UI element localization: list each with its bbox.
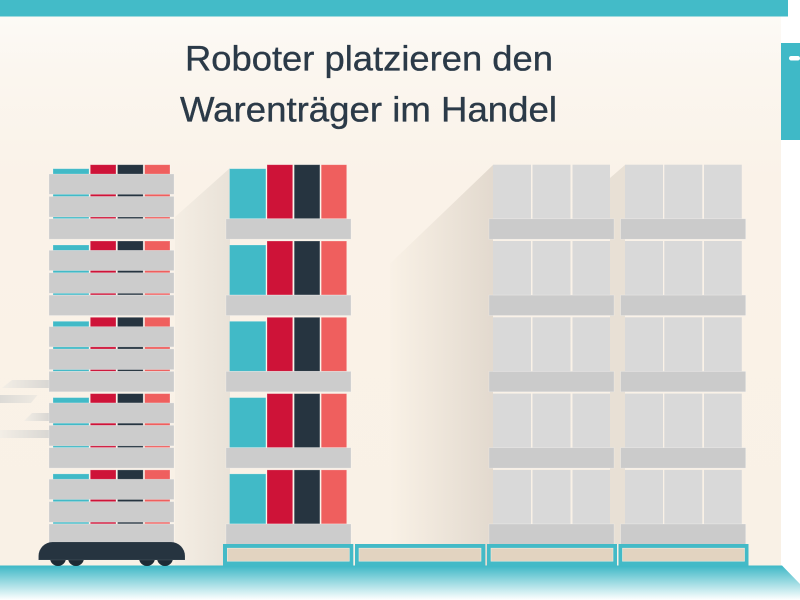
- rack tier 4: [226, 394, 351, 468]
- gray rack 1 tier 1: [489, 165, 614, 239]
- rack tier 1: [226, 165, 351, 239]
- floor: [0, 566, 800, 600]
- title: Roboter platzieren den: [185, 40, 553, 79]
- robot wheels: [50, 550, 173, 566]
- stack tier 5: [49, 470, 174, 544]
- shadow: second gray rack: [610, 165, 625, 544]
- gray rack 1 tier 4: [489, 394, 614, 468]
- pallet 1: [223, 544, 353, 566]
- gray rack 2: [621, 165, 746, 544]
- stack tier 2: [49, 241, 174, 316]
- gray rack 2 tier 1: [621, 165, 746, 239]
- gray rack 1 tier 3: [489, 317, 614, 392]
- robot: [38, 542, 185, 566]
- gray rack 1: [489, 165, 614, 544]
- gray rack 2 tier 2: [621, 241, 746, 316]
- side tab: [781, 43, 800, 140]
- gray rack 2 tier 4: [621, 394, 746, 468]
- shadow: first gray rack: [390, 165, 493, 566]
- rack tier 2: [226, 241, 351, 316]
- stack tier 1: [49, 165, 174, 239]
- title: Warenträger im Handel: [180, 91, 557, 130]
- pallet 3: [487, 544, 617, 566]
- title: [180, 40, 557, 130]
- gray rack 2 tier 3: [621, 317, 746, 392]
- stack tier 4: [49, 394, 174, 468]
- gray rack 1 tier 2: [489, 241, 614, 316]
- gray rack 1 tier 5: [489, 470, 614, 544]
- rack tier 3: [226, 317, 351, 392]
- robot carrier stack: [49, 165, 174, 544]
- top bar: [0, 0, 788, 16]
- colored goods rack: [226, 165, 351, 544]
- stack tier 3: [49, 317, 174, 392]
- gray rack 2 tier 5: [621, 470, 746, 544]
- motion lines: [0, 380, 49, 438]
- robot body: [38, 542, 185, 560]
- pallet 2: [355, 544, 485, 566]
- shadow: colored rack: [175, 168, 230, 566]
- pallet 4: [618, 544, 748, 566]
- rack tier 5: [226, 470, 351, 544]
